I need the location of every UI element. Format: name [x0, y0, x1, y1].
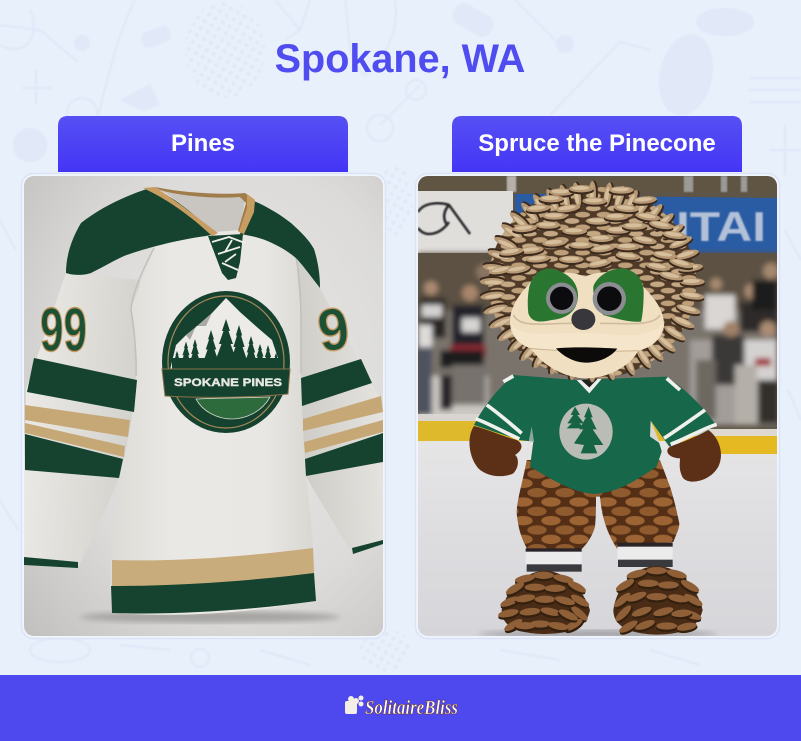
armhole seams	[131, 248, 154, 376]
hem stripes	[112, 548, 314, 586]
sleeve number left: 99	[40, 296, 87, 365]
right glove	[667, 430, 721, 482]
footer logo	[345, 696, 458, 719]
tab: Pines: Pines	[171, 130, 235, 157]
right sleeve	[296, 256, 383, 553]
blue banner	[515, 194, 777, 253]
banner letters: ITAI	[676, 203, 766, 250]
collar interior	[160, 190, 246, 232]
ad board logo	[418, 203, 470, 234]
ad board white	[418, 191, 513, 253]
rink boards	[418, 414, 651, 421]
ice	[418, 441, 777, 636]
left eye	[546, 283, 577, 314]
jersey body	[110, 189, 316, 615]
pine trees	[172, 319, 282, 370]
socks	[526, 543, 673, 572]
footer bar	[0, 675, 801, 741]
left sleeve	[24, 273, 140, 568]
left glove	[469, 426, 521, 476]
pinecone head base	[488, 187, 696, 379]
yellow dasher	[418, 421, 680, 441]
crest	[162, 291, 290, 433]
upper rafters	[418, 176, 777, 192]
crest banner	[162, 369, 290, 397]
sleeve number right: 9	[313, 294, 354, 365]
studio backdrop	[24, 176, 383, 636]
left eye patch	[528, 269, 578, 322]
green jersey	[474, 375, 717, 494]
feet left	[497, 571, 591, 636]
mascot	[469, 181, 721, 637]
left sleeve stripes	[27, 358, 137, 412]
V collar	[577, 379, 602, 393]
mountain	[170, 298, 282, 370]
title: Spokane, WA	[275, 37, 525, 81]
crowd	[418, 253, 779, 425]
logo card icon	[345, 696, 364, 714]
jersey crest	[559, 404, 613, 460]
crest text: SPOKANE PINES	[174, 377, 282, 389]
logo text: SolitaireBliss	[365, 697, 458, 719]
green yoke left	[66, 189, 216, 275]
face	[510, 269, 664, 378]
crest base	[196, 397, 270, 419]
tan collar	[143, 187, 218, 236]
lace neck	[208, 234, 245, 280]
tab: Spruce the Pinecone: Spruce the Pinecone	[478, 130, 716, 157]
arena background	[418, 176, 777, 430]
right sleeve stripes	[301, 359, 372, 406]
jersey	[24, 187, 383, 615]
sleeve stripes	[476, 376, 717, 444]
pinecone legs	[517, 460, 679, 551]
feet right	[612, 566, 704, 637]
tab: Spruce the Pinecone	[452, 116, 742, 172]
green yoke right	[240, 201, 320, 288]
nose	[571, 309, 595, 330]
head scales	[479, 181, 705, 383]
panel: jersey image	[22, 174, 386, 638]
mouth	[556, 347, 617, 363]
panel: mascot image	[416, 174, 780, 638]
right eye patch	[593, 269, 644, 322]
right eye	[593, 282, 626, 315]
tab: Pines	[58, 116, 348, 172]
